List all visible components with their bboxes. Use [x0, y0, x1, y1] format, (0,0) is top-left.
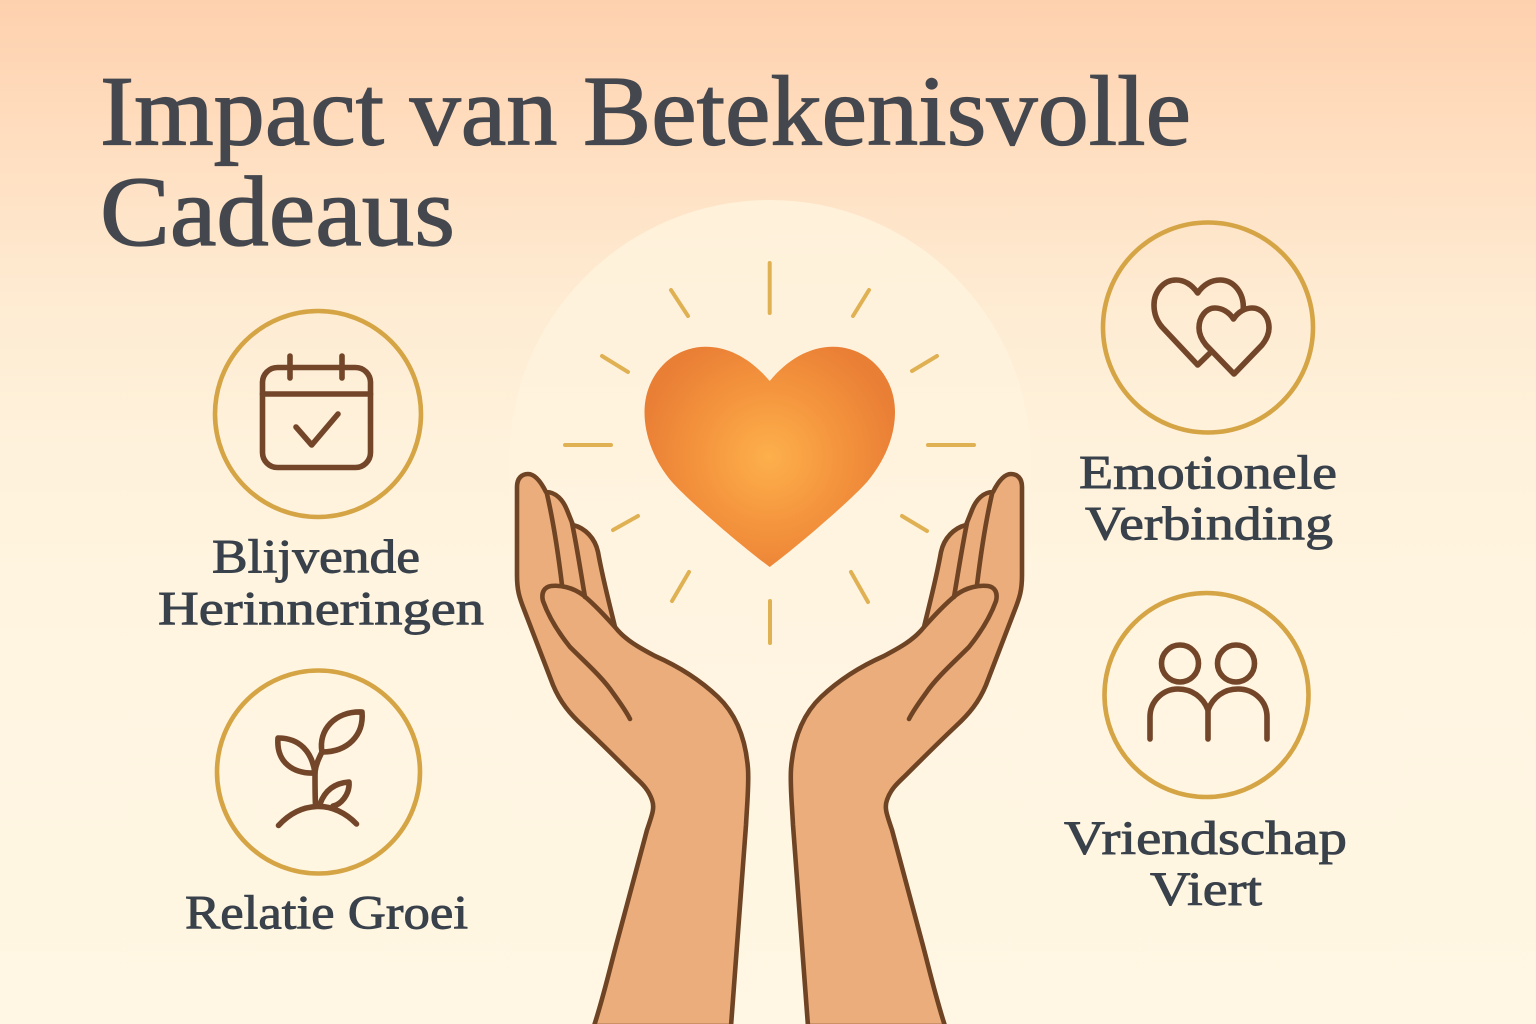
label: Relatie Groei	[185, 886, 468, 940]
label: Blijvende	[212, 530, 420, 584]
item: Relatie Groei	[185, 670, 468, 940]
label: Vriendschap	[1064, 812, 1347, 865]
label: Herinneringen	[158, 582, 484, 636]
right hand	[791, 474, 1022, 1024]
item: Vriendschap Viert	[1064, 593, 1347, 916]
icon: two people	[1104, 593, 1308, 797]
title	[100, 56, 1191, 267]
label	[158, 530, 484, 636]
item: Blijvende Herinneringen	[158, 311, 484, 636]
icon: two hearts	[1103, 222, 1313, 432]
label: Viert	[1150, 863, 1263, 916]
icon: sprout	[217, 670, 420, 874]
icon: calendar with check	[215, 311, 421, 517]
heart	[644, 347, 895, 567]
illustration: heart with rays in cupped hands	[517, 263, 1022, 1024]
label	[1064, 812, 1347, 916]
rays	[565, 263, 974, 643]
title: Impact van Betekenisvolle	[100, 56, 1191, 166]
label: Emotionele	[1079, 446, 1337, 500]
label: Verbinding	[1085, 498, 1333, 550]
label	[1079, 446, 1337, 550]
title: Cadeaus	[100, 156, 455, 267]
left hand	[517, 474, 748, 1024]
glow behind heart	[509, 200, 1031, 722]
item: Emotionele Verbinding	[1079, 222, 1337, 550]
